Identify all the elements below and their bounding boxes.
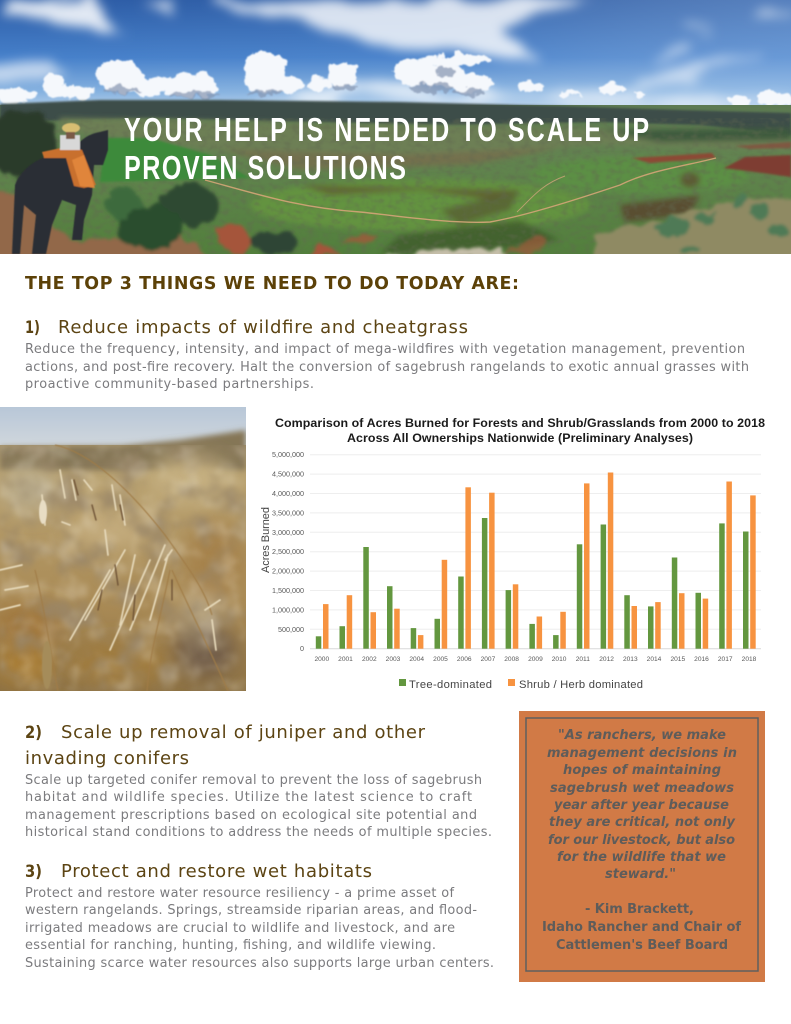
section 1 body: actions, and post-fire recovery. Halt the conversion of sagebrush rangelands to exotic annual grasses with <box>25 360 749 375</box>
y axis labels: 4,000,000 <box>272 489 304 498</box>
x axis labels: 2012 <box>599 656 614 663</box>
y axis labels: 2,000,000 <box>272 567 304 576</box>
section 2 heading <box>25 722 426 769</box>
grass stems <box>35 445 228 691</box>
land <box>0 105 791 255</box>
quote inner border <box>526 718 758 971</box>
y axis labels: 4,500,000 <box>272 470 304 479</box>
quote attribution <box>542 902 741 953</box>
section 2 heading: invading conifers <box>25 748 189 769</box>
x axis labels: 2004 <box>409 656 424 663</box>
bright green field <box>100 138 250 182</box>
y axis labels: 2,500,000 <box>272 547 304 556</box>
callout: rancher quote <box>519 711 765 982</box>
y axis labels: 0 <box>300 644 304 653</box>
chart title <box>275 416 765 445</box>
rider and horse <box>12 123 108 254</box>
series: tree-dominated bars <box>316 518 748 649</box>
hero title: YOUR HELP IS NEEDED TO SCALE UP <box>124 112 649 149</box>
legend: Shrub / Herb dominated <box>519 679 643 691</box>
hero title <box>124 112 649 187</box>
quote text: management decisions in <box>547 746 737 761</box>
quote attribution: - Kim Brackett, <box>585 902 694 917</box>
out-of-focus texture <box>0 445 246 691</box>
section 1 heading: Reduce impacts of wildfire and cheatgrass <box>58 317 468 338</box>
section 1 body <box>25 342 749 392</box>
chart title: Across All Ownerships Nationwide (Preliminary Analyses) <box>347 431 693 445</box>
quote text: for our livestock, but also <box>548 833 735 848</box>
bar chart: acres burned by year <box>260 416 765 691</box>
photo grain over land <box>0 118 791 254</box>
section 1 heading: 1) <box>25 318 40 338</box>
x axis labels: 2011 <box>576 656 590 663</box>
x axis labels: 2017 <box>718 656 733 663</box>
y axis labels: 500,000 <box>278 625 304 634</box>
wispy clouds <box>0 0 790 105</box>
quote text <box>547 728 737 882</box>
gridlines <box>310 455 761 649</box>
section 3 body: western rangelands. Springs, streamside riparian areas, and flood- <box>25 903 477 918</box>
valley and gullies <box>250 157 750 254</box>
quote text: hopes of maintaining <box>563 763 721 778</box>
quote text: they are critical, not only <box>549 815 736 830</box>
hero title: PROVEN SOLUTIONS <box>124 150 406 187</box>
x axis labels: 2008 <box>504 656 519 663</box>
y axis labels: 3,000,000 <box>272 528 304 537</box>
blurred field background <box>0 445 246 691</box>
mid slope bands <box>60 118 791 170</box>
section 2 body: habitat and wildlife species. Utilize the latest science to craft <box>25 790 472 805</box>
x axis labels: 2007 <box>481 656 496 663</box>
x axis labels: 2014 <box>647 656 662 663</box>
y axis title: Acres Burned <box>260 507 272 573</box>
quote text: for the wildlife that we <box>557 850 726 865</box>
section 2 body: historical stand conditions to address the needs of multiple species. <box>25 825 492 840</box>
quote text: steward." <box>605 867 676 882</box>
section 3 heading: 3) <box>25 862 42 882</box>
seed heads <box>0 470 220 650</box>
y axis labels <box>272 450 304 653</box>
legend <box>399 679 643 691</box>
section 1 body: proactive community-based partnerships. <box>25 377 314 392</box>
x axis labels: 2018 <box>742 656 757 663</box>
cumulus clouds <box>0 51 791 106</box>
quote attribution: Cattlemen's Beef Board <box>556 938 728 953</box>
section 2 body: Scale up targeted conifer removal to prevent the loss of sagebrush <box>25 773 482 788</box>
x axis labels <box>314 656 757 663</box>
y axis labels: 1,500,000 <box>272 586 304 595</box>
hero banner: landscape photo with rider and horse <box>0 0 791 262</box>
quote text: year after year because <box>554 798 729 813</box>
x axis labels: 2016 <box>694 656 709 663</box>
section 3 body <box>25 886 494 971</box>
main heading: THE TOP 3 THINGS WE NEED TO DO TODAY ARE: <box>25 274 519 294</box>
x axis labels: 2001 <box>338 656 353 663</box>
quote text: "As ranchers, we make <box>558 728 726 743</box>
section 3 body: Protect and restore water resource resiliency - a prime asset of <box>25 886 454 901</box>
x axis labels: 2000 <box>314 656 329 663</box>
y axis labels: 5,000,000 <box>272 450 304 459</box>
series: shrub / herb dominated bars <box>323 472 756 649</box>
foreground slopes, rocks and bushes <box>0 109 791 262</box>
y axis labels: 3,500,000 <box>272 508 304 517</box>
section 3 body: Sustaining scarce water resources also supports large urban centers. <box>25 956 494 971</box>
quote panel <box>519 711 765 982</box>
distant hills <box>0 100 791 135</box>
section 2 body: management prescriptions based on ecological site potential and <box>25 808 477 823</box>
chart title: Comparison of Acres Burned for Forests and Shrub/Grasslands from 2000 to 2018 <box>275 416 765 430</box>
quote attribution: Idaho Rancher and Chair of <box>542 920 741 935</box>
photo: cheatgrass seed heads <box>0 407 246 691</box>
x axis labels: 2013 <box>623 656 638 663</box>
section 2 body <box>25 773 492 840</box>
x axis labels: 2005 <box>433 656 448 663</box>
x axis labels: 2010 <box>552 656 567 663</box>
y axis labels: 1,000,000 <box>272 605 304 614</box>
sky <box>0 0 791 115</box>
section 1 body: Reduce the frequency, intensity, and impact of mega-wildfires with vegetation management, prevention <box>25 342 745 357</box>
section 3 body: essential for ranching, hunting, fishing, and wildlife viewing. <box>25 938 436 953</box>
quote text: sagebrush wet meadows <box>550 781 734 796</box>
red fields <box>632 153 716 163</box>
dirt road <box>205 158 716 222</box>
x axis labels: 2015 <box>670 656 685 663</box>
x axis labels: 2003 <box>386 656 401 663</box>
section 3 heading: Protect and restore wet habitats <box>61 861 372 882</box>
legend: Tree-dominated <box>409 679 492 691</box>
section 2 heading: 2) <box>25 723 42 743</box>
x axis labels: 2002 <box>362 656 377 663</box>
x axis labels: 2009 <box>528 656 543 663</box>
x axis labels: 2006 <box>457 656 472 663</box>
section 2 heading: Scale up removal of juniper and other <box>61 722 426 743</box>
section 3 body: irrigated meadows are crucial to wildlife and livestock, and are <box>25 921 455 936</box>
